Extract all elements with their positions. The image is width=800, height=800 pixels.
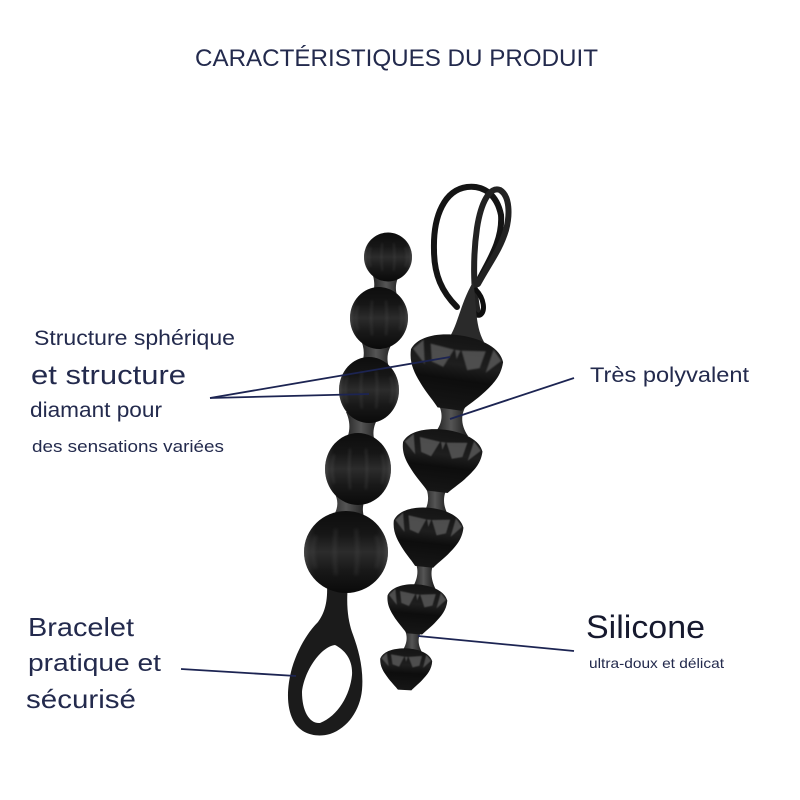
double loop cord	[434, 187, 508, 315]
callout: structure text: diamant pour	[30, 399, 162, 422]
callout: bracelet: Bracelet	[28, 612, 135, 642]
callout: bracelet: sécurisé	[26, 684, 136, 714]
callout: structure text: et structure	[31, 360, 186, 390]
product: diamond bead chain	[379, 187, 508, 691]
product: spherical bead chain	[288, 232, 412, 735]
callout: polyvalent: Très polyvalent	[590, 364, 749, 387]
callout: bracelet: pratique et	[28, 650, 161, 677]
callout: structure text	[30, 327, 235, 456]
diamond beads	[379, 329, 506, 691]
leader line: silicone	[418, 636, 574, 651]
callout: silicone: Silicone	[586, 609, 705, 645]
loop handle	[288, 585, 362, 735]
callout: silicone	[586, 609, 724, 671]
callout: structure text: Structure sphérique	[34, 327, 235, 350]
callout: silicone: ultra-doux et délicat	[589, 655, 724, 671]
callout: bracelet	[26, 612, 161, 714]
title: CARACTÉRISTIQUES DU PRODUIT	[195, 45, 598, 72]
callout: structure text: des sensations variées	[32, 437, 224, 456]
leader lines: structure	[210, 357, 450, 398]
leader line: polyvalent	[450, 378, 574, 419]
neck connectors	[400, 282, 484, 654]
neck connectors	[322, 268, 404, 528]
sphere beads	[304, 232, 412, 593]
leader line: bracelet	[181, 669, 296, 676]
